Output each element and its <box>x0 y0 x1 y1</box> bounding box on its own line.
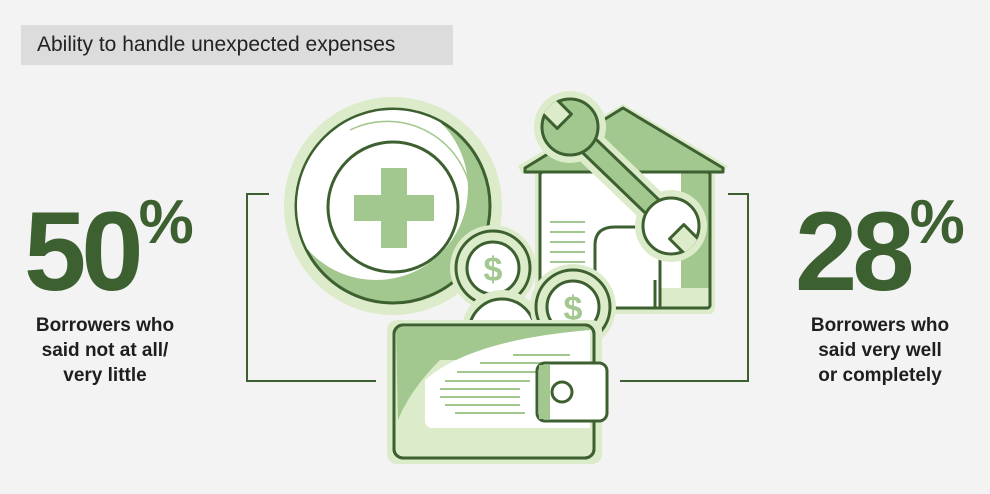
label left <box>36 315 174 386</box>
label right: said very well <box>818 340 942 361</box>
label right <box>811 315 949 386</box>
icon: house <box>518 104 728 314</box>
stat right: 28%: 28% <box>795 188 965 314</box>
label left: said not at all/ <box>42 340 168 361</box>
title <box>21 25 453 65</box>
icon: coins: $ <box>564 290 583 328</box>
icon: wallet <box>387 320 607 464</box>
title: Ability to handle unexpected expenses <box>37 33 395 56</box>
label left: Borrowers who <box>36 315 174 336</box>
icon: medical coin <box>284 96 502 315</box>
label right: or completely <box>818 365 942 386</box>
label right: Borrowers who <box>811 315 949 336</box>
icon: coins <box>450 225 616 370</box>
illustration <box>246 91 749 464</box>
icon: wrench <box>534 91 707 262</box>
label left: very little <box>63 365 147 386</box>
stat left: 50%: 50% <box>24 188 194 314</box>
icon: coins: $ <box>484 251 503 289</box>
